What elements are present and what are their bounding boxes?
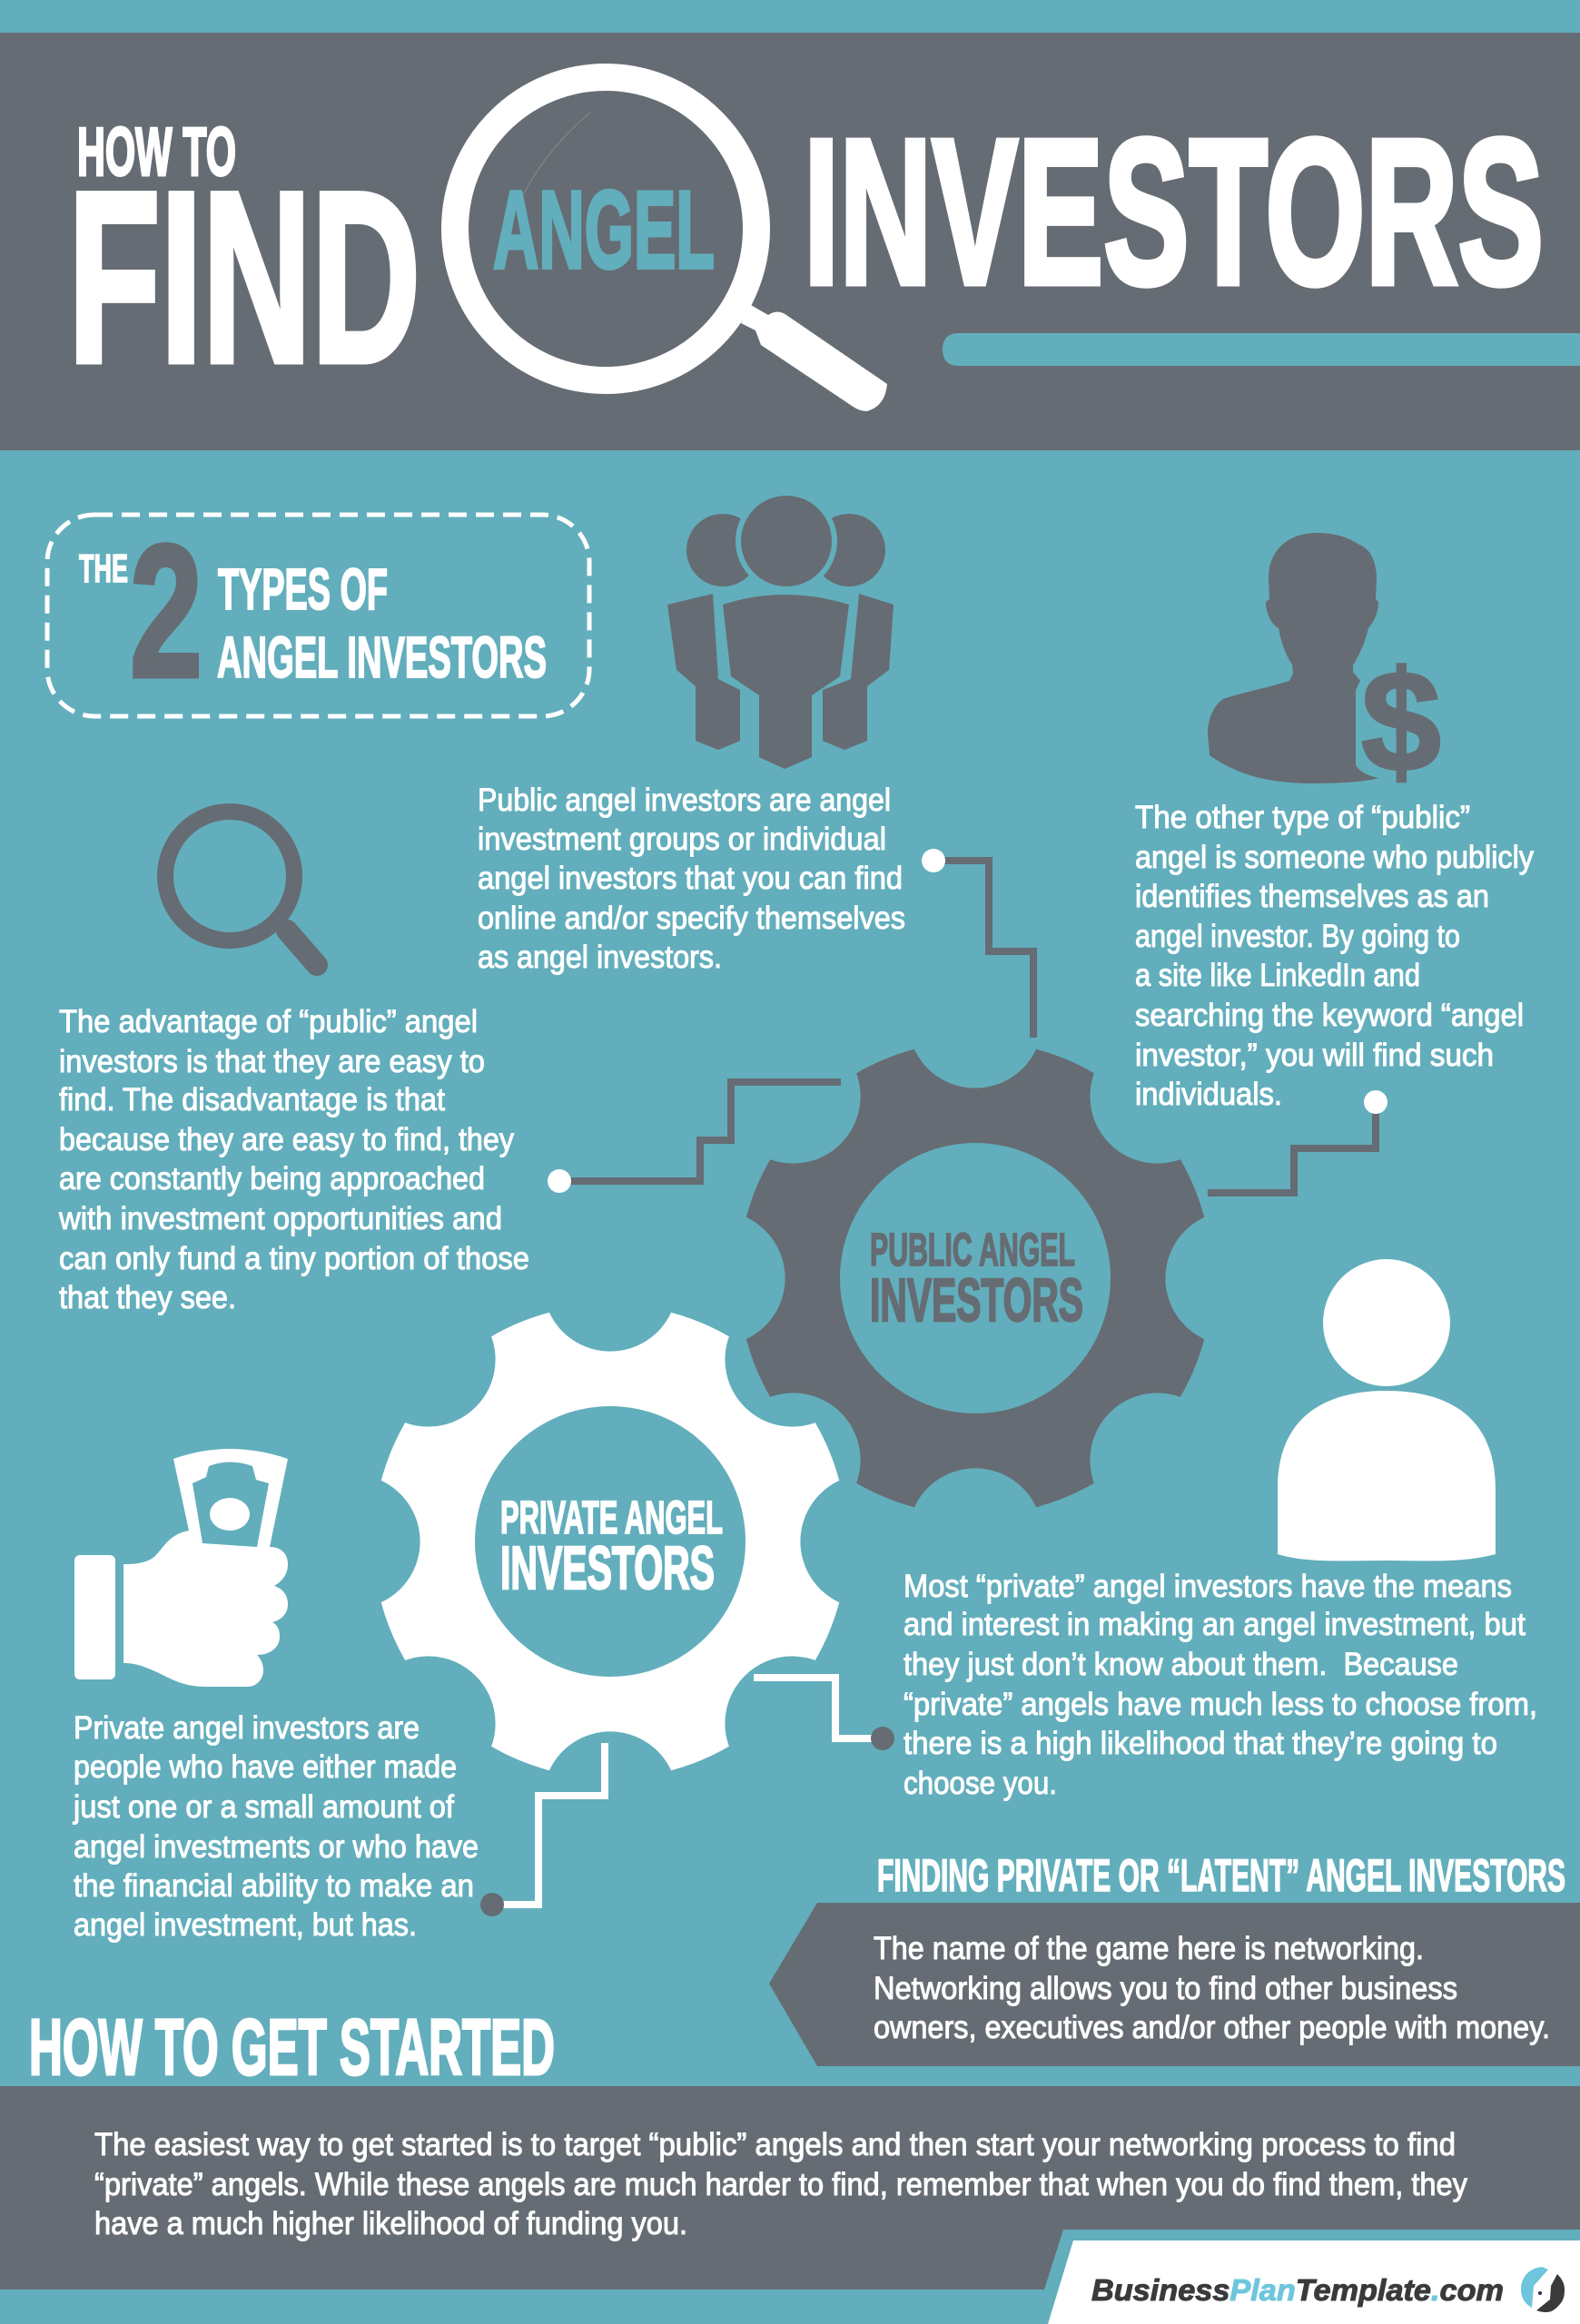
icon: person with dollar sign [1208,533,1441,802]
heading: how to get started: HOW TO GET STARTED [29,2004,555,2092]
text: private angel investors definition: angel investments or who have [74,1829,479,1865]
text: public angel investors definition: online and/or specify themselves [478,901,905,936]
text: other type of public angel: The other type of “public” [1135,800,1470,835]
title: find: FIND [68,141,420,413]
text: most private angel investors: there is a high likelihood that they’re going to [904,1726,1497,1761]
header banner [0,33,1580,450]
the: THE [79,547,128,591]
gear: private angel investors [381,1313,839,1770]
text: private angel investors definition [73,1710,479,1943]
gear label: private angel: PRIVATE ANGEL [500,1492,723,1543]
panel: how to get started text band [0,2086,1580,2290]
text: advantages of public angels: with investment opportunities and [58,1201,502,1236]
text: advantages of public angels: are constantly being approached [59,1161,485,1196]
text: other type of public angel: individuals. [1135,1077,1282,1112]
gear label: investors: INVESTORS [500,1534,715,1602]
text: advantages of public angels: because they are easy to find, they [59,1122,514,1157]
panel: how to get started text band: “private” angels. While these angels are much harder to find, remember that when you do find them, they [94,2167,1467,2202]
text: public angel investors definition: investment groups or individual [478,822,886,857]
icon: large magnifying glass [455,77,887,411]
icon: search magnifier [165,812,317,965]
title: how to: HOW TO [77,113,236,190]
text: other type of public angel: angel investor. By going to [1135,919,1460,954]
numeral 2: 2 [130,507,202,717]
text: public angel investors definition: as angel investors. [478,940,722,975]
panel: how to get started text band: The easiest way to get started is to target “public” angels and then start your networking process to find [94,2127,1456,2162]
text: most private angel investors: choose you. [904,1766,1057,1801]
text: advantages of public angels: The advantage of “public” angel [59,1004,478,1039]
text: private angel investors definition: just one or a small amount of [73,1789,454,1825]
text: public angel investors definition: angel investors that you can find [478,861,903,896]
text: advantages of public angels: that they see. [59,1280,236,1315]
badge: the 2 types of angel investors [47,507,589,717]
panel: networking arrow box: Networking allows you to find other business [874,1971,1457,2006]
text: private angel investors definition: angel investment, but has. [74,1907,417,1943]
connector: other type text to gear [1208,1090,1387,1193]
text: most private angel investors [904,1569,1537,1801]
gear label: investors: INVESTORS [870,1266,1083,1334]
panel: networking arrow box: The name of the game here is networking. [874,1931,1424,1966]
panel: how to get started text band: have a much higher likelihood of funding you. [94,2206,687,2241]
text: advantages of public angels: investors is that they are easy to [59,1044,485,1079]
connector: private gear to right text [754,1678,894,1750]
text: other type of public angel: identifies themselves as an [1135,879,1489,914]
text: private angel investors definition: Private angel investors are [74,1710,420,1746]
text: other type of public angel: angel is someone who publicly [1135,840,1534,875]
title: angel: ANGEL [493,168,715,291]
icon: hand holding money [74,1449,288,1687]
accent bar [943,333,1580,366]
text: most private angel investors: and interest in making an angel investment, but [904,1607,1526,1642]
dollar sign: $ [1361,642,1441,802]
text: most private angel investors: “private” angels have much less to choose from, [904,1687,1537,1722]
text: private angel investors definition: people who have either made [74,1749,457,1785]
text: advantages of public angels: find. The disadvantage is that [59,1082,445,1118]
text: advantages of public angels: can only fund a tiny portion of those [59,1241,529,1276]
icon: person silhouette [1278,1259,1496,1561]
connector: private gear to left text [480,1743,605,1916]
text: other type of public angel: investor,” you will find such [1135,1038,1494,1073]
panel: networking arrow box [769,1903,1580,2066]
angel investors: ANGEL INVESTORS [217,625,547,690]
text: most private angel investors: they just don’t know about them. Because [904,1647,1458,1682]
connector: public text to gear [922,849,1033,1038]
gear label: public angel: PUBLIC ANGEL [870,1224,1075,1275]
text: public angel investors definition [478,783,905,975]
text: advantages of public angels [58,1004,529,1315]
text: other type of public angel: a site like LinkedIn and [1135,958,1420,993]
types of: TYPES OF [218,556,388,622]
logo icon: pen nib [1521,2267,1565,2312]
icon: group of people [667,490,894,769]
text: private angel investors definition: the financial ability to make an [74,1868,474,1904]
text: other type of public angel [1135,800,1534,1112]
logo wordmark: BusinessPlanTemplate.com [1091,2273,1504,2307]
footer: logo panel [1048,2240,1580,2324]
connector: advantages text to gear [548,1082,841,1193]
text: public angel investors definition: Public angel investors are angel [478,783,891,818]
gear: public angel investors [746,1049,1204,1507]
text: most private angel investors: Most “private” angel investors have the means [904,1569,1512,1604]
text: other type of public angel: searching the keyword “angel [1135,998,1524,1033]
